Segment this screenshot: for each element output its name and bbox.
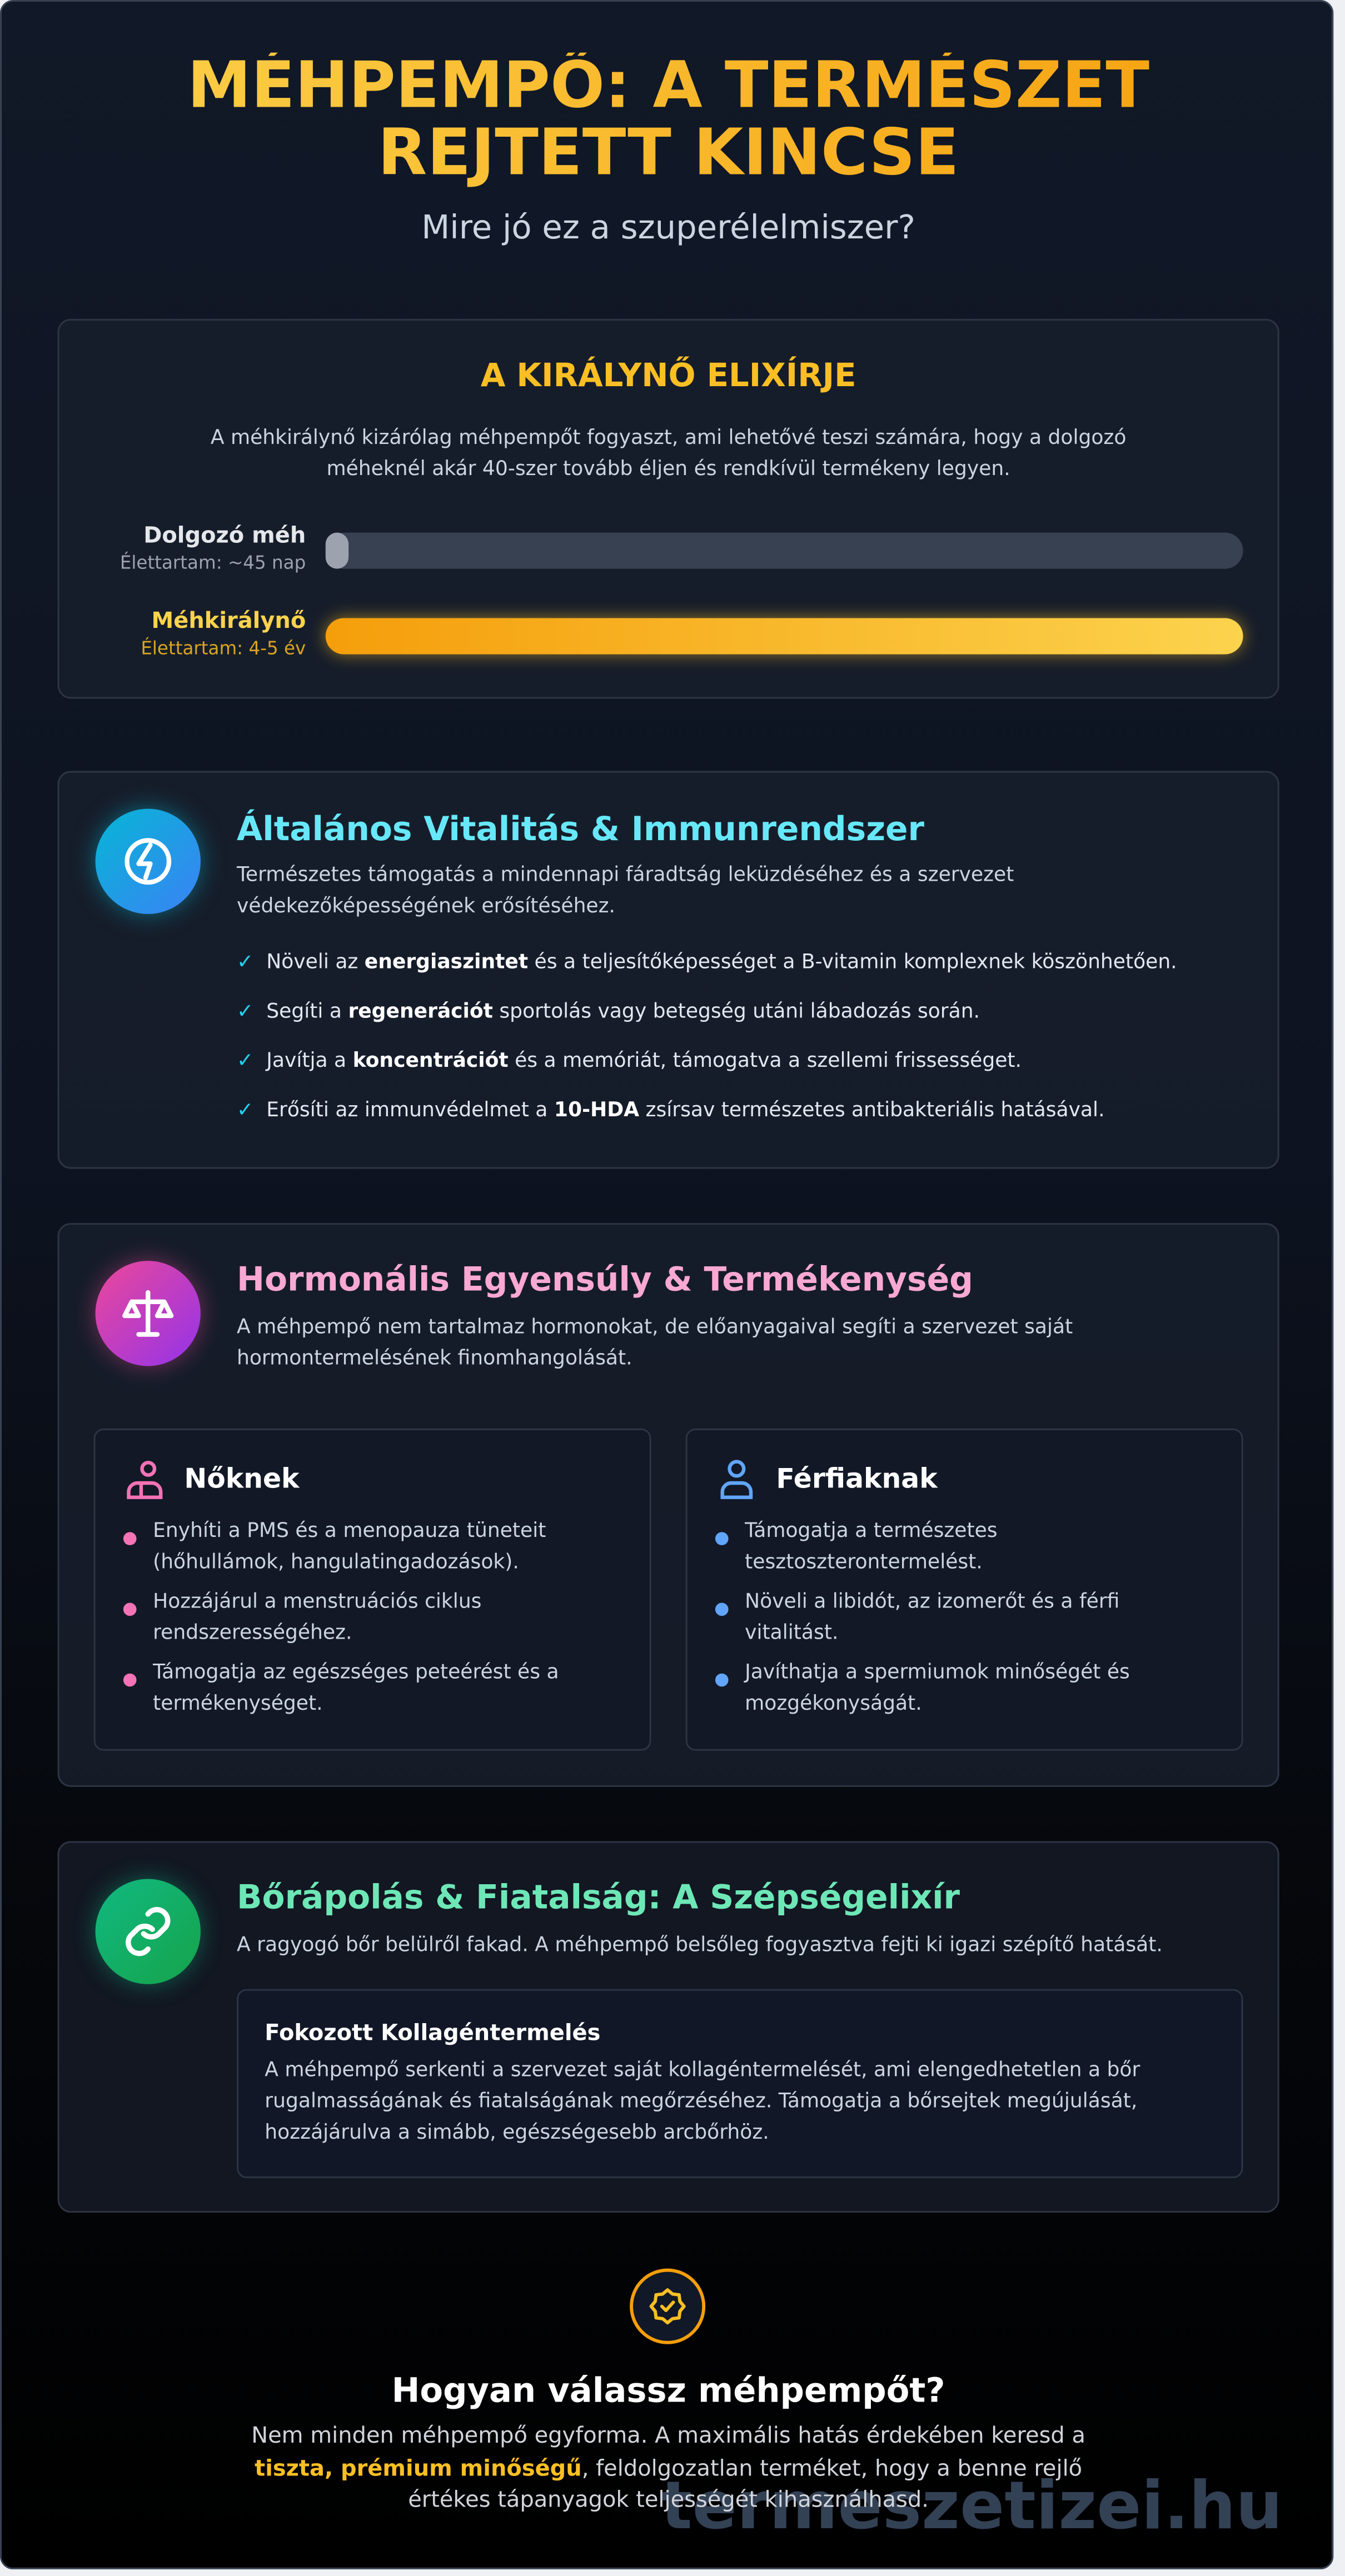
description (211, 426, 1126, 480)
checklist (237, 950, 1177, 1121)
description: Természetes támogatás a mindennapi fáradtság leküzdéséhez és a szervezet (237, 863, 1014, 886)
inner box: collagen: A méhpempő serkenti a szervezet saját kollagéntermelését, ami elengedhetetlen a bőr (265, 2058, 1140, 2081)
title: MÉHPEMPŐ: A TERMÉSZET (187, 49, 1149, 123)
sub-card: women: Támogatja az egészséges peteérést és a (153, 1660, 559, 1683)
icon: man (720, 1460, 753, 1499)
sub-card: men: mozgékonyságát. (745, 1691, 922, 1715)
sub-card: men: Javíthatja a spermiumok minőségét és (745, 1660, 1130, 1683)
inner box: collagen: Fokozott Kollagéntermelés (265, 2020, 600, 2046)
description: védekezőképességének erősítéséhez. (237, 894, 615, 917)
label: queen (141, 608, 306, 659)
panel heading: A KIRÁLYNŐ ELIXÍRJE (481, 357, 856, 395)
sub-card: men: tesztoszterontermelést. (745, 1550, 983, 1573)
checklist: Javítja a koncentrációt és a memóriát, támogatva a szellemi frissességet. (266, 1049, 1022, 1072)
footer text: értékes tápanyagok teljességét kihasználhasd. (408, 2487, 929, 2513)
label: worker bee (120, 523, 306, 573)
description: A méhkirálynő kizárólag méhpempőt fogyaszt, ami lehetővé teszi számára, hogy a dolgozó (211, 426, 1126, 449)
footer text: Nem minden méhpempő egyforma. A maximális hatás érdekében keresd a (251, 2423, 1085, 2449)
icon: energy shield (96, 809, 201, 914)
checklist: Erősíti az immunvédelmet a 10-HDA zsírsav természetes antibakteriális hatásával. (266, 1098, 1105, 1121)
bar: queen (326, 618, 1243, 654)
sub-card: men: Támogatja a természetes (745, 1519, 998, 1542)
checklist: ✓ (237, 1000, 253, 1022)
description: hormontermelésének finomhangolását. (237, 1346, 632, 1369)
sub-card: women: Enyhíti a PMS és a menopauza tüneteit (153, 1519, 546, 1542)
label: worker bee: Dolgozó méh (143, 523, 306, 549)
label: worker bee: Élettartam: ~45 nap (120, 552, 306, 573)
description (237, 1315, 1073, 1369)
checklist: ✓ (237, 1049, 253, 1072)
description: A ragyogó bőr belülről fakad. A méhpempő belsőleg fogyasztva fejti ki igazi szépítő hatását. (237, 1933, 1163, 1956)
checklist: Növeli az energiaszintet és a teljesítőképességet a B-vitamin komplexnek köszönhetően. (266, 950, 1177, 973)
title (2, 53, 1335, 187)
label: queen: Élettartam: 4-5 év (141, 638, 306, 659)
heading: Bőrápolás & Fiatalság: A Szépségelixír (237, 1878, 960, 1917)
watermark: termeszetizei.hu (661, 2469, 1283, 2545)
heading: Nőknek (184, 1463, 300, 1494)
panel: hormonal balance (58, 1223, 1279, 1787)
description: méheknél akár 40-szer tovább éljen és rendkívül termékeny legyen. (326, 457, 1010, 480)
title: REJTETT KINCSE (378, 117, 959, 191)
description (237, 863, 1014, 917)
bar: worker (326, 533, 1243, 569)
sub-card: women: (hőhullámok, hangulatingadozások). (153, 1550, 519, 1573)
footer text: tiszta, prémium minőségű, feldolgozatlan terméket, hogy a benne rejlő (255, 2455, 1082, 2482)
subtitle: Mire jó ez a szuperélelmiszer? (421, 207, 915, 247)
checklist: ✓ (237, 1098, 253, 1121)
panel: skin care (58, 1841, 1279, 2213)
panel: queen elixir (58, 319, 1279, 698)
sub-card: men (686, 1429, 1243, 1751)
panel: vitality (58, 771, 1279, 1169)
bullets (123, 1532, 137, 1545)
heading: Általános Vitalitás & Immunrendszer (237, 809, 924, 848)
footer heading: Hogyan válassz méhpempőt? (392, 2370, 945, 2410)
checklist: Segíti a regenerációt sportolás vagy betegség utáni lábadozás során. (266, 1000, 980, 1022)
icon: quality badge (630, 2269, 705, 2344)
icon: link (96, 1879, 201, 1984)
sub-card: women: Hozzájárul a menstruációs ciklus (153, 1590, 481, 1613)
sub-card: women: rendszerességéhez. (153, 1621, 352, 1644)
sub-card: men: vitalitást. (745, 1621, 838, 1644)
footer text (251, 2423, 1085, 2513)
inner box: collagen (237, 1989, 1243, 2178)
description: A méhpempő nem tartalmaz hormonokat, de előanyagaival segíti a szervezet saját (237, 1315, 1073, 1338)
sub-card: women (94, 1429, 651, 1751)
icon: balance (96, 1261, 201, 1366)
label: queen: Méhkirálynő (152, 608, 306, 635)
checklist: ✓ (237, 950, 253, 973)
heading: Férfiaknak (776, 1463, 938, 1494)
inner box: collagen: rugalmasságának és fiatalságának megőrzéséhez. Támogatja a bőrsejtek megújulását, (265, 2089, 1137, 2113)
bullets (715, 1532, 729, 1545)
heading: Hormonális Egyensúly & Termékenység (237, 1259, 973, 1299)
icon: woman (127, 1461, 162, 1499)
inner box: collagen: hozzájárulva a simább, egészségesebb arcbőrhöz. (265, 2120, 769, 2144)
sub-card: women: termékenységet. (153, 1691, 323, 1715)
sub-card: men: Növeli a libidót, az izomerőt és a férfi (745, 1590, 1119, 1613)
